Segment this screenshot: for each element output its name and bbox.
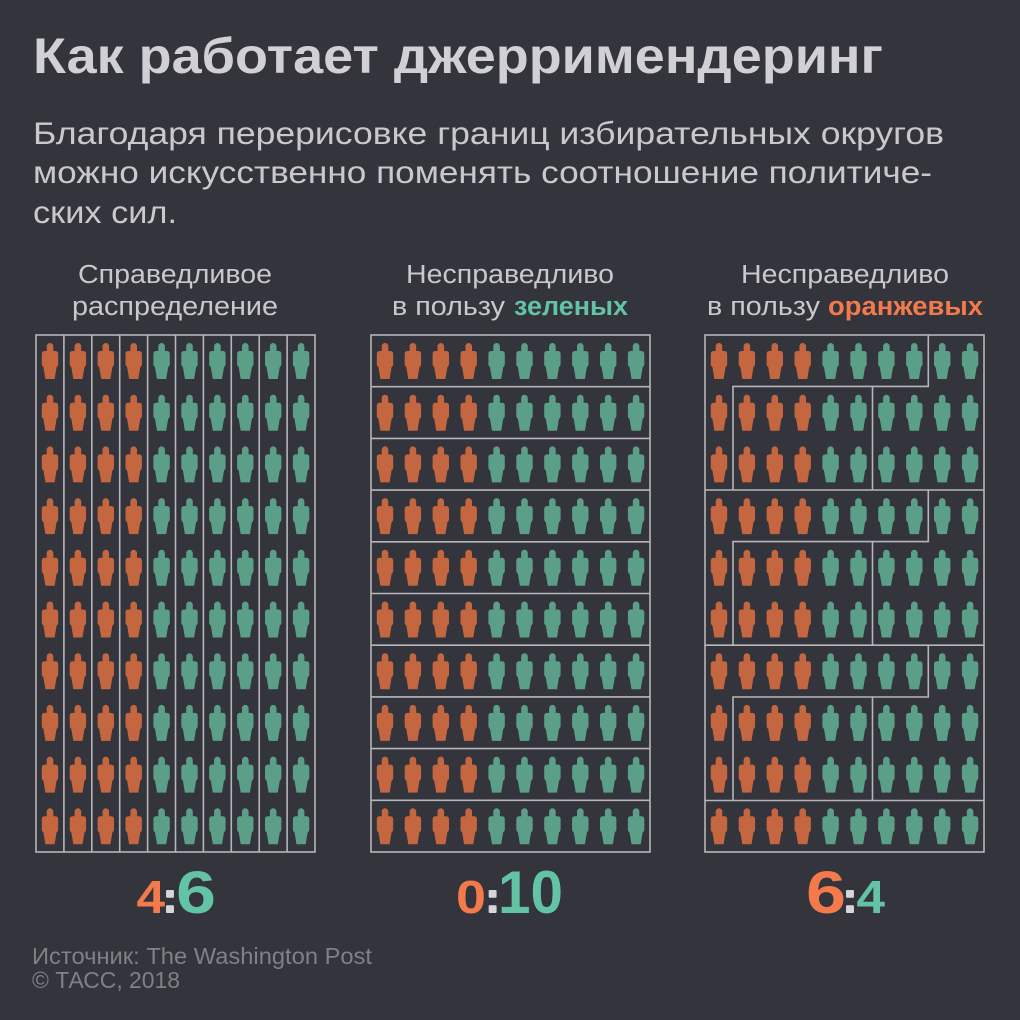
ratio 6:4: 6 [806, 859, 846, 926]
heading: unfair in favour of orange [707, 261, 983, 321]
subtitle text block: ских сил. [33, 194, 177, 230]
heading: unfair in favour of orange: оранжевых [828, 293, 983, 321]
heading: fair distribution: Справедливое [78, 261, 272, 289]
ratio 4:6: : [163, 874, 177, 921]
ratio 6:4 [806, 859, 885, 926]
title: Как работает джерримендеринг [33, 27, 883, 84]
ratio 4:6 [136, 859, 216, 926]
heading: fair distribution [72, 261, 278, 321]
ratio 6:4: 4 [856, 871, 885, 923]
ratio 0:10: 10 [498, 859, 563, 926]
heading: unfair in favour of orange: Несправедливо [741, 261, 949, 289]
subtitle text block [33, 115, 944, 230]
source and copyright [32, 943, 373, 993]
heading: unfair in favour of green [392, 261, 628, 321]
ratio 0:10: 0 [456, 871, 486, 923]
heading: unfair in favour of green: зеленых [514, 293, 628, 321]
ratio 0:10 [456, 859, 563, 926]
ratio 0:10: : [486, 874, 500, 921]
source and copyright: Источник: The Washington Post [32, 943, 373, 969]
subtitle text block: можно искусственно поменять соотношение политиче- [33, 154, 932, 190]
panel: gerrymandered districts favouring orange [705, 335, 984, 852]
subtitle text block: Благодаря перерисовке границ избирательных округов [33, 115, 944, 151]
ratio 6:4: : [843, 874, 857, 921]
source and copyright: © ТАСС, 2018 [32, 967, 180, 993]
heading: unfair in favour of orange: в пользу [707, 293, 820, 321]
ratio 4:6: 6 [176, 859, 216, 926]
panel: fair vertical districts [36, 335, 315, 852]
heading: unfair in favour of green: Несправедливо [406, 261, 614, 289]
heading: fair distribution: распределение [72, 293, 278, 321]
ratio 4:6: 4 [136, 871, 165, 923]
panel: horizontal districts favouring green [371, 335, 650, 852]
heading: unfair in favour of green: в пользу [392, 293, 505, 321]
